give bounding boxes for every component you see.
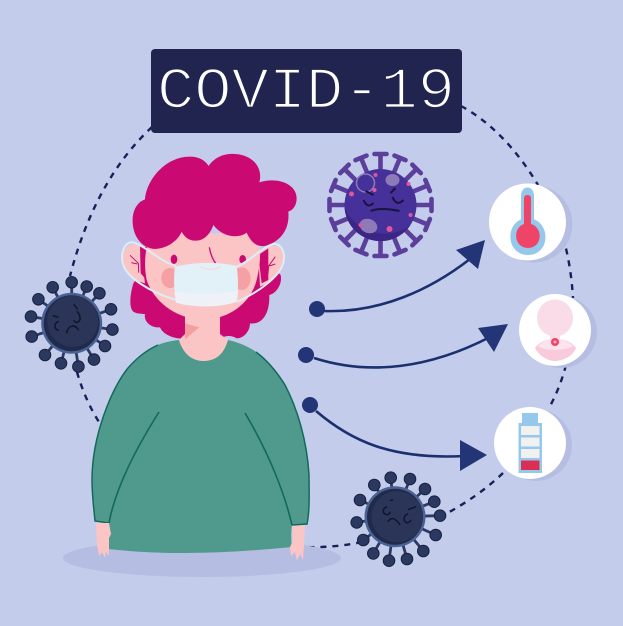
virus face	[53, 304, 80, 333]
purple virus	[330, 154, 432, 256]
lower hair	[130, 247, 281, 340]
title text: COVID-19	[157, 60, 455, 126]
spikes	[25, 276, 118, 372]
left hand	[96, 523, 111, 558]
icon: thermometer	[489, 184, 572, 262]
virus body	[41, 293, 102, 354]
neck	[179, 307, 228, 361]
neck shadow	[185, 323, 199, 339]
eyes	[171, 255, 177, 264]
virus face	[383, 500, 416, 525]
face	[145, 233, 260, 320]
sweater	[92, 340, 309, 553]
mask straps	[122, 242, 284, 302]
face mask	[122, 242, 284, 306]
spikes	[351, 472, 446, 566]
ground shadow	[63, 539, 341, 577]
dashed ring connecting elements	[70, 106, 573, 547]
icon: low battery	[494, 407, 572, 481]
right ear	[258, 246, 284, 287]
virus body	[344, 169, 416, 241]
icon: sore throat	[519, 294, 597, 368]
virus face	[364, 188, 404, 211]
cheeks	[161, 268, 179, 288]
left ear	[122, 244, 145, 283]
arrow: sore throat	[298, 324, 508, 367]
arrow: fatigue	[302, 397, 487, 471]
spikes	[330, 154, 432, 256]
title banner	[151, 49, 462, 133]
hair by ears	[140, 247, 268, 283]
head and hair	[122, 154, 297, 361]
virus body	[364, 486, 426, 547]
nose line	[209, 247, 216, 263]
top hair	[133, 154, 297, 249]
arrow: fever	[309, 240, 485, 317]
dark virus left	[25, 276, 118, 372]
right hand	[290, 525, 305, 561]
person	[92, 154, 309, 561]
dark virus bottom	[351, 472, 446, 566]
